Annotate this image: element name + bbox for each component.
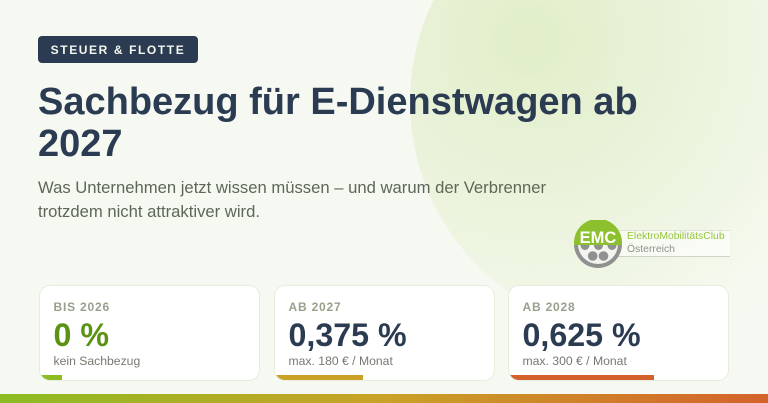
card label: AB 2028 xyxy=(522,300,575,314)
card label: BIS 2026 xyxy=(54,300,110,314)
background circle xyxy=(410,0,768,334)
card value: 0,625 % xyxy=(522,317,641,353)
logo name: ElektroMobilitätsClub xyxy=(627,231,725,242)
title: 2027 xyxy=(38,123,123,165)
tag: Steuer & Flotte: STEUER & FLOTTE xyxy=(51,43,185,57)
card: bis 2026 xyxy=(39,285,260,380)
subtitle xyxy=(38,178,546,221)
title xyxy=(38,81,638,165)
card: ab 2028 xyxy=(508,285,729,380)
logo country: Österreich xyxy=(627,244,675,255)
subtitle: Was Unternehmen jetzt wissen müssen – und warum der Verbrenner xyxy=(38,178,546,197)
card value: 0 % xyxy=(54,317,109,353)
card label: AB 2027 xyxy=(288,300,341,314)
logo: EMC Österreich xyxy=(574,220,730,268)
progress bar xyxy=(275,375,363,380)
bottom gradient strip xyxy=(0,394,768,403)
logo text panel xyxy=(618,230,730,257)
card note: max. 300 € / Monat xyxy=(522,354,627,368)
logo emblem: EMC xyxy=(580,229,616,247)
progress bar xyxy=(40,375,62,380)
card note: kein Sachbezug xyxy=(54,354,140,368)
card value: 0,375 % xyxy=(288,317,407,353)
card: ab 2027 xyxy=(274,285,495,380)
title: Sachbezug für E-Dienstwagen ab xyxy=(38,81,638,123)
tag: Steuer & Flotte xyxy=(38,36,198,63)
subtitle: trotzdem nicht attraktiver wird. xyxy=(38,202,260,221)
progress bar xyxy=(509,375,654,380)
logo emblem xyxy=(574,220,622,268)
card note: max. 180 € / Monat xyxy=(288,354,393,368)
